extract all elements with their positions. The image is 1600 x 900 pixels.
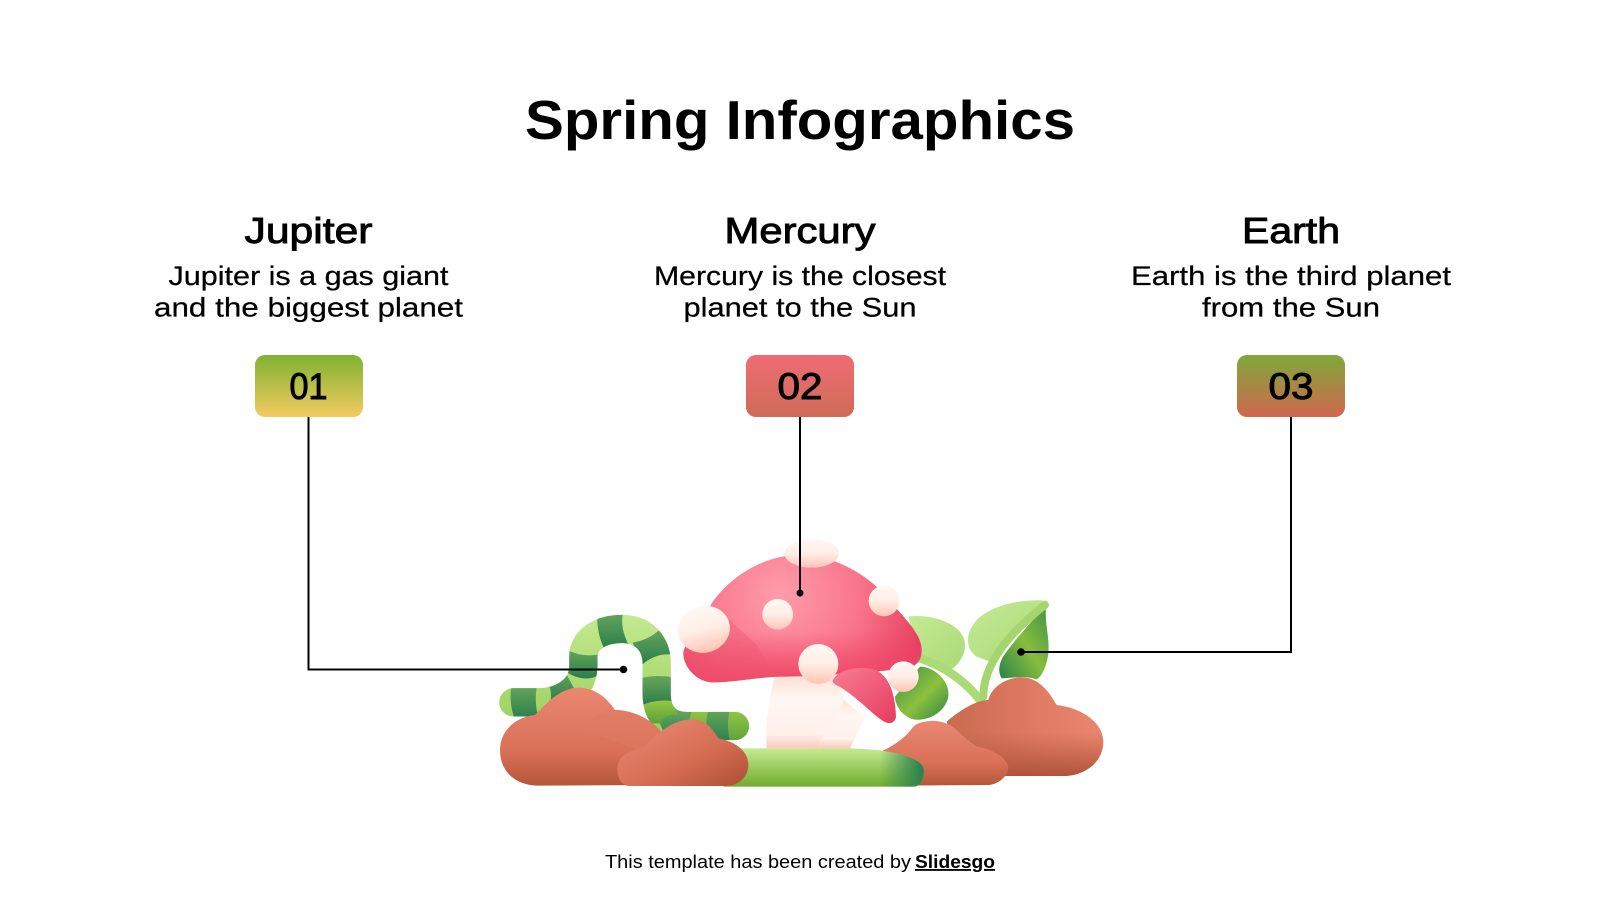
text: Mercury description: [654, 261, 947, 322]
column: Earth: [1131, 210, 1452, 322]
heading: Earth: Earth: [1242, 210, 1340, 251]
connector: 03 to leaf: [1017, 417, 1291, 656]
badge 01: [255, 355, 363, 417]
badge 03: [1237, 355, 1345, 417]
icon: mushroom spots: [673, 539, 919, 692]
column: Jupiter: [154, 210, 464, 322]
text: Jupiter description: Jupiter is a gas giant: [168, 261, 449, 291]
icon: mushroom: [673, 539, 922, 748]
icon: left soil mounds: [500, 688, 748, 786]
column: Mercury: [654, 210, 947, 322]
footer credit: Slidesgo: [915, 851, 995, 872]
text: Mercury description: Mercury is the closest: [654, 261, 947, 291]
illustration: mushroom, worm, leaves and soil: [480, 539, 1103, 787]
badge 01: 01: [290, 366, 328, 407]
title: Spring Infographics: [525, 89, 1075, 151]
badge 02: [746, 355, 854, 417]
connector: 02 to mushroom: [796, 417, 804, 596]
text: Mercury description: planet to the Sun: [684, 292, 916, 322]
text: Earth description: from the Sun: [1202, 292, 1380, 322]
text: Jupiter description: [154, 261, 464, 322]
text: Jupiter description: and the biggest planet: [154, 292, 464, 322]
heading: Jupiter: Jupiter: [244, 210, 373, 251]
icon: grass: [723, 748, 924, 787]
icon: leaves: [895, 600, 1049, 720]
badge 02: 02: [778, 366, 822, 407]
heading: Mercury: Mercury: [724, 210, 876, 251]
icon: worm: [499, 614, 750, 740]
text: Earth description: Earth is the third planet: [1131, 261, 1452, 291]
footer credit: This template has been created by: [605, 851, 912, 872]
badge 03: 03: [1268, 366, 1314, 407]
icon: right soil mounds: [880, 677, 1103, 786]
connector: 01 to worm: [308, 417, 627, 673]
text: Earth description: [1131, 261, 1452, 322]
